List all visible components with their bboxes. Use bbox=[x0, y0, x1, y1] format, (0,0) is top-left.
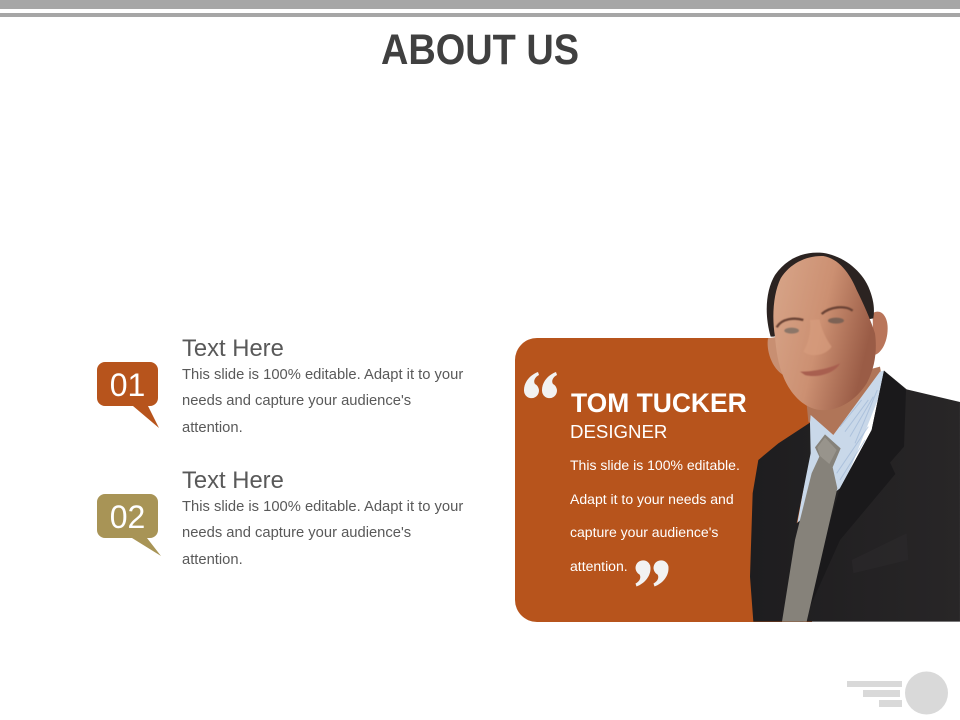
quote text: Adapt it to your needs and bbox=[570, 491, 734, 507]
item 01 bbox=[97, 335, 463, 436]
face features bbox=[777, 307, 853, 376]
top decorative bars bbox=[0, 0, 960, 17]
text block 02 bbox=[182, 499, 463, 568]
icon: speech bubble 02: 02 bbox=[110, 499, 145, 535]
ear left bbox=[768, 337, 783, 375]
text block 02: This slide is 100% editable. Adapt it to your bbox=[182, 499, 463, 515]
footer icon: speeding circle bbox=[847, 672, 948, 714]
icon: opening quote bbox=[524, 372, 557, 398]
suit jacket bbox=[750, 371, 960, 622]
hair bbox=[767, 253, 874, 337]
ear right bbox=[873, 312, 888, 355]
heading: text here 02: Text Here bbox=[182, 467, 284, 494]
name: TOM TUCKER bbox=[571, 388, 747, 418]
text block 01: needs and capture your audience's bbox=[182, 393, 411, 409]
role: DESIGNER bbox=[570, 421, 667, 442]
heading: text here 01: Text Here bbox=[182, 335, 284, 362]
panel: profile card bbox=[515, 338, 812, 622]
text block 01: This slide is 100% editable. Adapt it to your bbox=[182, 367, 463, 383]
title: ABOUT US bbox=[381, 26, 579, 74]
text block 02: needs and capture your audience's bbox=[182, 525, 411, 541]
item 02 bbox=[97, 467, 463, 568]
quote text: attention. bbox=[570, 558, 628, 574]
shirt bbox=[797, 371, 884, 527]
text block 01: attention. bbox=[182, 420, 243, 436]
quote text: capture your audience's bbox=[570, 524, 718, 540]
photo: portrait of man in suit bbox=[750, 253, 960, 622]
icon: speech bubble 02 bbox=[97, 494, 161, 556]
icon: speech bubble 01 bbox=[97, 362, 159, 428]
icon: closing quote bbox=[636, 560, 669, 586]
text block 02: attention. bbox=[182, 552, 243, 568]
quote text bbox=[570, 457, 740, 574]
quote text: This slide is 100% editable. bbox=[570, 457, 740, 473]
icon: speech bubble 01: 01 bbox=[110, 367, 145, 403]
neck bbox=[805, 367, 883, 437]
text block 01 bbox=[182, 367, 463, 436]
tie bbox=[782, 434, 841, 622]
head bbox=[773, 256, 876, 410]
